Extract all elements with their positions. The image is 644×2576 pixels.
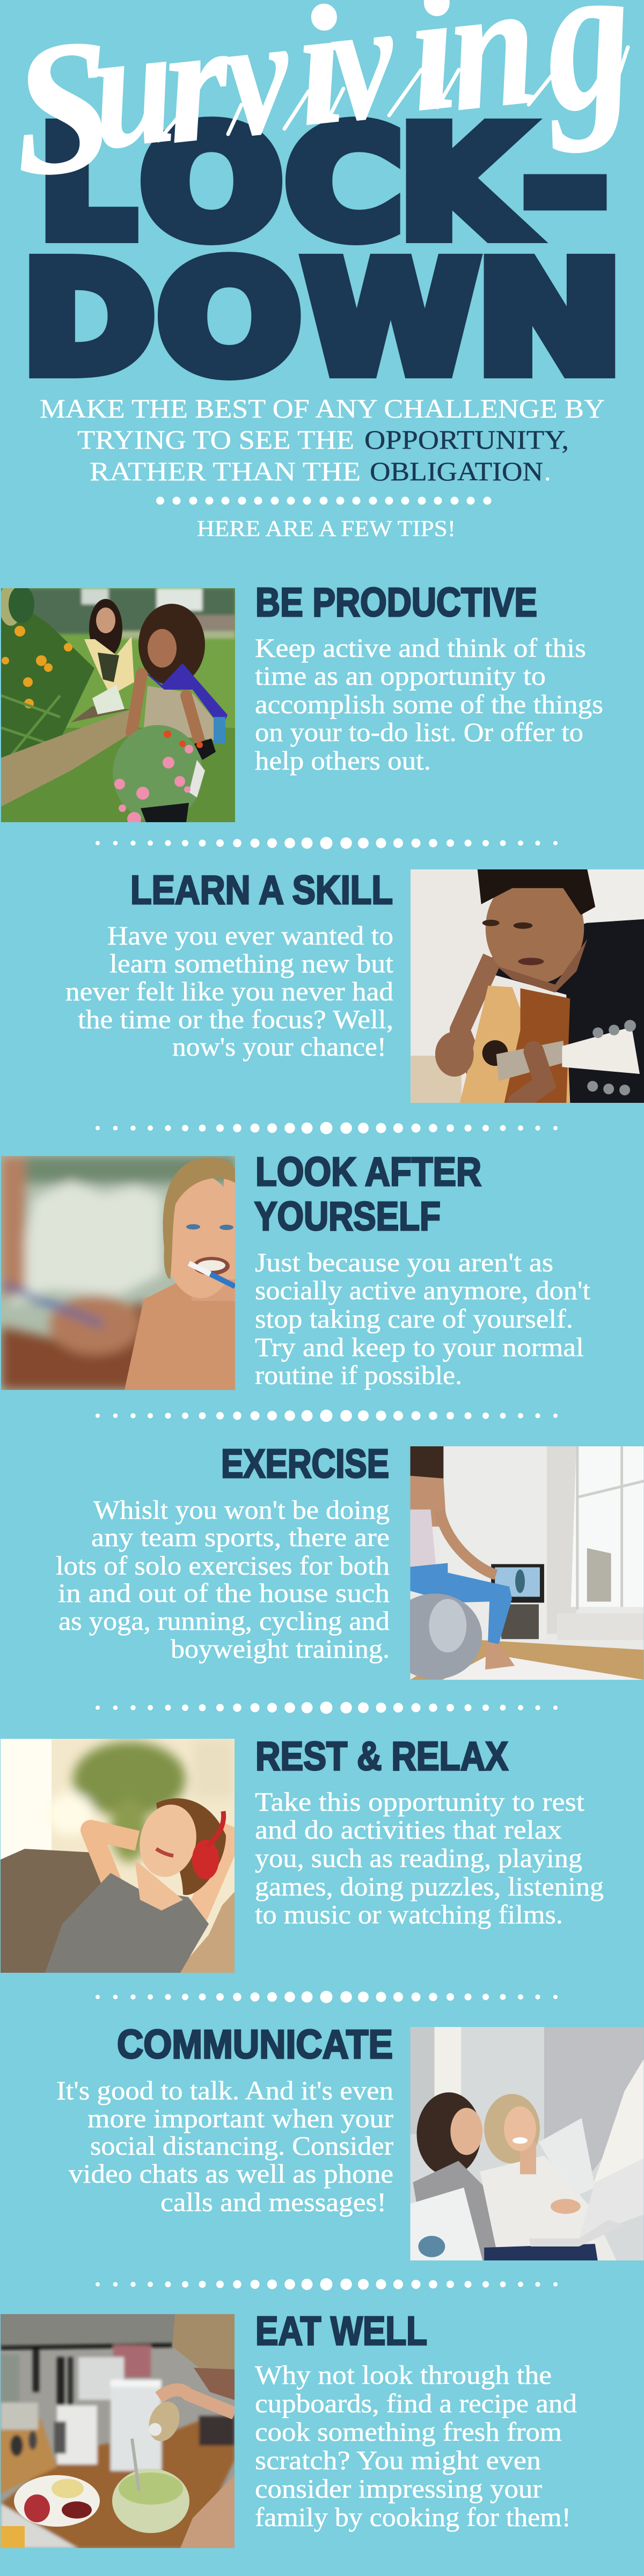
body text — [255, 1787, 604, 1929]
title: LOCK-DOWN: C — [286, 97, 402, 272]
title: LOCK-DOWN: N — [477, 232, 623, 406]
body text: in and out of the house such — [58, 1578, 390, 1608]
body text: Keep active and think of this — [255, 633, 586, 663]
photo: exercise ball — [410, 1446, 644, 1680]
photo: relaxing with headphones — [1, 1739, 235, 1973]
body text: Take this opportunity to rest — [255, 1787, 584, 1817]
intro text — [40, 393, 605, 486]
panel: be productive — [0, 580, 603, 826]
girl in front — [131, 604, 228, 760]
body text: any team sports, there are — [91, 1522, 390, 1552]
intro text: . — [544, 456, 551, 486]
panel: eat well — [1, 2308, 577, 2548]
intro text: OPPORTUNITY, — [364, 425, 569, 455]
body text: scratch? You might even — [255, 2445, 541, 2475]
body text: social distancing. Consider — [90, 2131, 393, 2161]
title: LOCK-DOWN: - — [523, 96, 608, 271]
body text: family by cooking for them! — [255, 2502, 571, 2532]
body text: and do activities that relax — [255, 1814, 562, 1845]
body text: socially active anymore, don't — [255, 1275, 590, 1305]
intro text: TRYING TO SEE THE — [77, 425, 354, 455]
body text — [56, 1495, 390, 1664]
heading: LEARN A SKILL — [130, 867, 393, 912]
body text: Have you ever wanted to — [107, 920, 393, 950]
body text: cook something fresh from — [255, 2417, 562, 2447]
body text: It's good to talk. And it's even — [56, 2075, 393, 2105]
photo: two women with laptop — [410, 2027, 644, 2260]
heading: COMMUNICATE — [117, 2022, 393, 2067]
title: Surviving script — [7, 0, 642, 216]
panel: learn a skill — [65, 867, 644, 1103]
body text: time as an opportunity to — [255, 661, 546, 691]
body text: learn something new but — [109, 948, 393, 978]
body text: routine if possible. — [255, 1360, 462, 1390]
heading: BE PRODUCTIVE — [255, 580, 537, 625]
photo: brushing teeth — [1, 1156, 235, 1390]
body text: boyweight training. — [171, 1634, 390, 1664]
title: LOCK-DOWN: W — [304, 232, 478, 406]
title: LOCK-DOWN: L — [39, 97, 135, 272]
panel: communicate — [56, 2022, 644, 2260]
body text: as yoga, running, cycling and — [58, 1606, 390, 1636]
body text: accomplish some of the things — [255, 689, 603, 719]
body text: never felt like you never had — [65, 976, 393, 1006]
tips line: HERE ARE A FEW TIPS! — [197, 517, 456, 541]
flowering plant — [113, 725, 205, 826]
body text: now's your chance! — [172, 1031, 386, 1062]
body text: Whislt you won't be doing — [93, 1495, 390, 1525]
body text: Try and keep to your normal — [255, 1332, 584, 1362]
heading: LOOK AFTER — [255, 1149, 481, 1194]
body text: to music or watching films. — [255, 1899, 563, 1929]
title: LOCK-DOWN: O — [141, 96, 282, 271]
body text: video chats as well as phone — [69, 2158, 393, 2189]
body text: you, such as reading, playing — [255, 1843, 582, 1873]
body text — [65, 920, 393, 1062]
panel: look after yourself — [1, 1149, 590, 1390]
title: LOCK-DOWN: D — [23, 232, 155, 407]
body text: help others out. — [255, 745, 431, 775]
title: LOCK-DOWN: O — [158, 232, 301, 407]
photo: cooking — [1, 2314, 235, 2548]
title: LOCK-DOWN: K — [399, 97, 530, 272]
intro text: OBLIGATION — [370, 456, 543, 486]
body text: stop taking care of yourself. — [255, 1304, 573, 1334]
heading — [254, 1149, 481, 1239]
intro text: RATHER THAN THE — [90, 456, 361, 486]
body text: Just because you aren't as — [255, 1247, 553, 1277]
body text: on your to-do list. Or offer to — [255, 717, 583, 747]
photo: guitar — [411, 869, 644, 1103]
body text — [255, 2360, 577, 2532]
body text: the time or the focus? Well, — [78, 1004, 393, 1034]
panel: rest and relax — [1, 1733, 604, 1973]
body text: games, doing puzzles, listening — [255, 1871, 604, 1901]
body text — [56, 2075, 393, 2217]
photo: gardening — [1, 588, 235, 822]
title: LOCK-DOWN — [23, 96, 623, 407]
body text — [255, 1247, 590, 1390]
body text: more important when your — [87, 2103, 393, 2133]
panel: exercise — [56, 1441, 644, 1680]
intro text: MAKE THE BEST OF ANY CHALLENGE BY — [40, 393, 605, 423]
body text: cupboards, find a recipe and — [255, 2388, 577, 2418]
girl in back — [84, 599, 134, 714]
heading: YOURSELF — [254, 1194, 441, 1239]
heading: EXERCISE — [221, 1441, 389, 1486]
heading: REST & RELAX — [255, 1733, 508, 1779]
title: Surviving script: S — [7, 0, 118, 216]
body text: lots of solo exercises for both — [56, 1550, 390, 1580]
body text: Why not look through the — [255, 2360, 552, 2390]
body text — [255, 633, 603, 775]
body text: calls and messages! — [160, 2187, 386, 2217]
body text: consider impressing your — [255, 2473, 542, 2504]
heading: EAT WELL — [255, 2308, 427, 2353]
